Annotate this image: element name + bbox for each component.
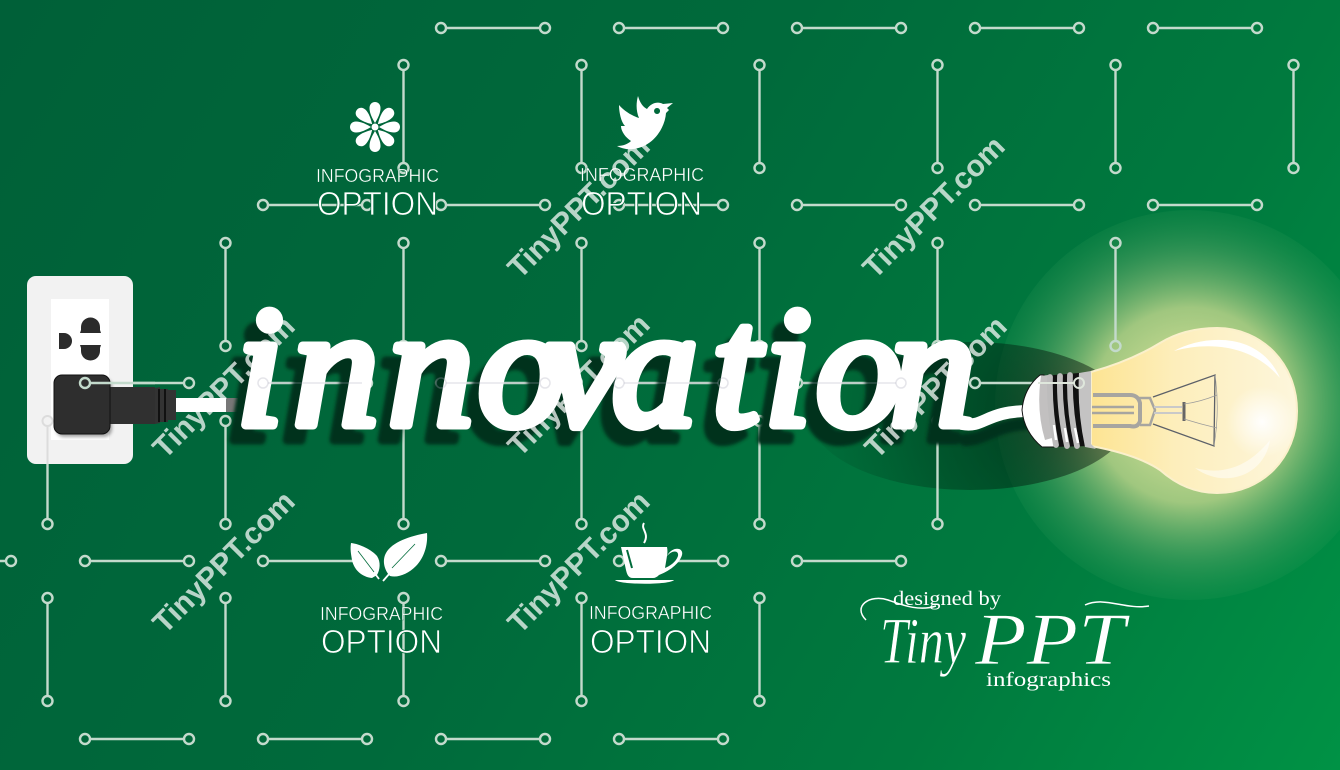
watermarks bbox=[147, 130, 1014, 640]
label: OPTION bbox=[590, 623, 711, 660]
power cord bbox=[176, 398, 238, 412]
option: flower bbox=[316, 102, 439, 222]
screw base bbox=[1022, 371, 1096, 449]
icon: flower bbox=[350, 102, 400, 152]
hot spot bbox=[1226, 386, 1298, 458]
option: bird bbox=[580, 96, 704, 222]
label: INFOGRAPHIC bbox=[589, 602, 712, 623]
logo: designed by TinyPPT infographics: PPT bbox=[974, 599, 1131, 681]
watermarks: TinyPPT.com bbox=[502, 130, 657, 285]
watermarks: TinyPPT.com bbox=[859, 310, 1014, 465]
watermarks: TinyPPT.com bbox=[502, 308, 657, 463]
label: OPTION bbox=[581, 185, 702, 222]
icon: leaves bbox=[351, 533, 427, 581]
top highlight bbox=[1174, 340, 1280, 378]
light bulb bbox=[1022, 328, 1298, 493]
label: OPTION bbox=[321, 623, 442, 660]
logo: designed by TinyPPT infographics: designed by bbox=[893, 588, 1001, 610]
label: OPTION bbox=[317, 185, 438, 222]
wall socket bbox=[27, 276, 133, 464]
connector to bulb bbox=[962, 411, 1030, 425]
label: INFOGRAPHIC bbox=[316, 165, 439, 186]
grid node over base bbox=[1038, 378, 1084, 388]
label bbox=[580, 164, 704, 222]
option: coffee cup bbox=[589, 523, 712, 660]
plug overlay grid nodes bbox=[80, 378, 155, 388]
filament bbox=[1092, 375, 1217, 446]
label: INFOGRAPHIC bbox=[580, 164, 704, 185]
label bbox=[316, 165, 439, 222]
cast shadow behind word end bbox=[810, 342, 1130, 490]
logo: designed by TinyPPT infographics: Tiny bbox=[880, 605, 967, 678]
watermarks: TinyPPT.com bbox=[502, 485, 657, 640]
innovation word shadow: innovation bbox=[224, 288, 964, 478]
icon: cup bbox=[615, 523, 682, 584]
lower highlight bbox=[1195, 440, 1270, 478]
watermarks: TinyPPT.com bbox=[857, 130, 1012, 285]
label: INFOGRAPHIC bbox=[320, 603, 443, 624]
watermarks: TinyPPT.com bbox=[147, 310, 302, 465]
icon: bird bbox=[617, 96, 673, 149]
faint grid over word bbox=[258, 378, 906, 388]
glass bbox=[1091, 328, 1297, 493]
label bbox=[320, 603, 443, 660]
option: leaves bbox=[320, 533, 443, 660]
plug bbox=[54, 375, 176, 437]
logo: designed by TinyPPT infographics: infographics bbox=[986, 669, 1111, 691]
watermarks: TinyPPT.com bbox=[147, 485, 302, 640]
logo: designed by TinyPPT infographics bbox=[861, 588, 1149, 691]
innovation word: innovation bbox=[236, 273, 976, 463]
bulb glow bbox=[995, 210, 1340, 600]
label bbox=[589, 602, 712, 660]
